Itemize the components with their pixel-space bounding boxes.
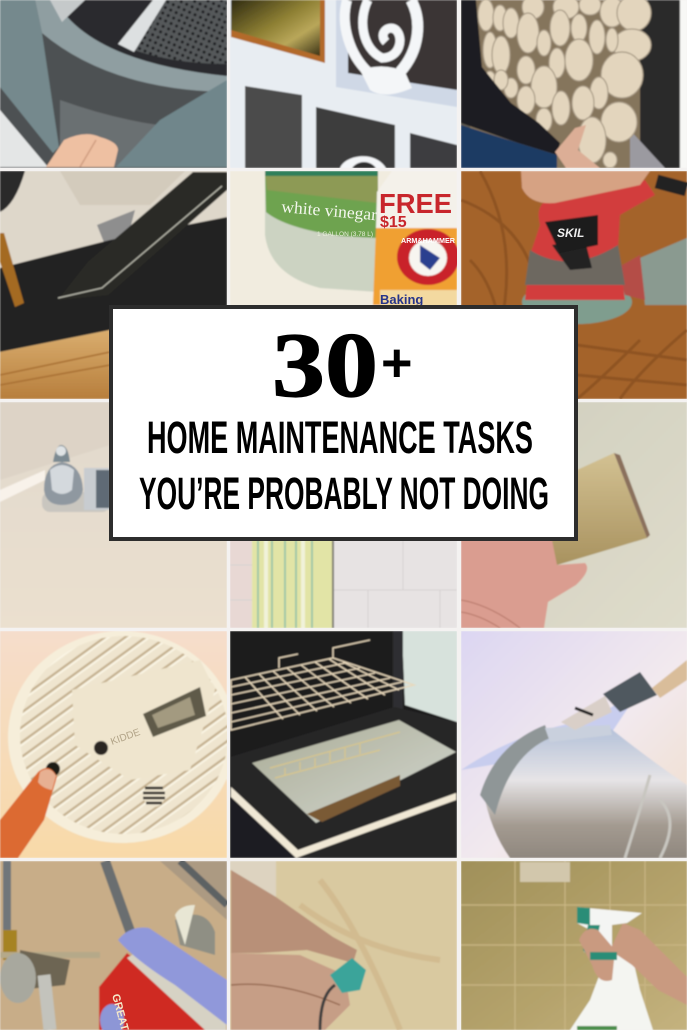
panel: smoke detector photo bbox=[0, 631, 236, 858]
title box bbox=[111, 307, 576, 539]
panel: dryer vent and white door photo bbox=[230, 0, 457, 168]
sander brand text: SKIL bbox=[557, 226, 584, 240]
panel: dryer duct clamp photo bbox=[461, 631, 687, 858]
box text: baking: Baking bbox=[380, 292, 423, 307]
box text: brand: ARM&HAMMER bbox=[401, 236, 456, 245]
panel: vinegar and baking soda photo bbox=[230, 171, 457, 305]
panel: crowbar on black metal photo bbox=[0, 171, 227, 399]
box text: FREE: FREE bbox=[379, 188, 452, 219]
panel: log stack fireplace photo bbox=[461, 0, 687, 168]
panel: washing machine gasket photo bbox=[0, 0, 227, 168]
box text: price: $15 bbox=[380, 214, 407, 231]
detector brand text: KIDDE bbox=[109, 727, 142, 748]
label text: gallon: 1 GALLON (3.78 L) bbox=[317, 231, 373, 238]
panel: under-sink pipes with foam can photo bbox=[0, 861, 227, 1030]
panel: oven rack and door photo bbox=[230, 631, 457, 858]
label text: white vinegar: white vinegar bbox=[281, 197, 378, 224]
panel: towel and subway tile photo bbox=[230, 541, 457, 628]
title number: 30: 30 bbox=[272, 314, 378, 416]
panel: spray bottle on bathroom tile photo bbox=[461, 861, 687, 1030]
panel: orbital sander on wood floor photo bbox=[461, 171, 687, 399]
title plus sign: + bbox=[381, 333, 413, 393]
panel: bathroom faucet photo bbox=[0, 402, 227, 628]
panel: hand with clip on stone wall photo bbox=[230, 861, 457, 1030]
panel: sanding wall photo bbox=[461, 402, 687, 628]
